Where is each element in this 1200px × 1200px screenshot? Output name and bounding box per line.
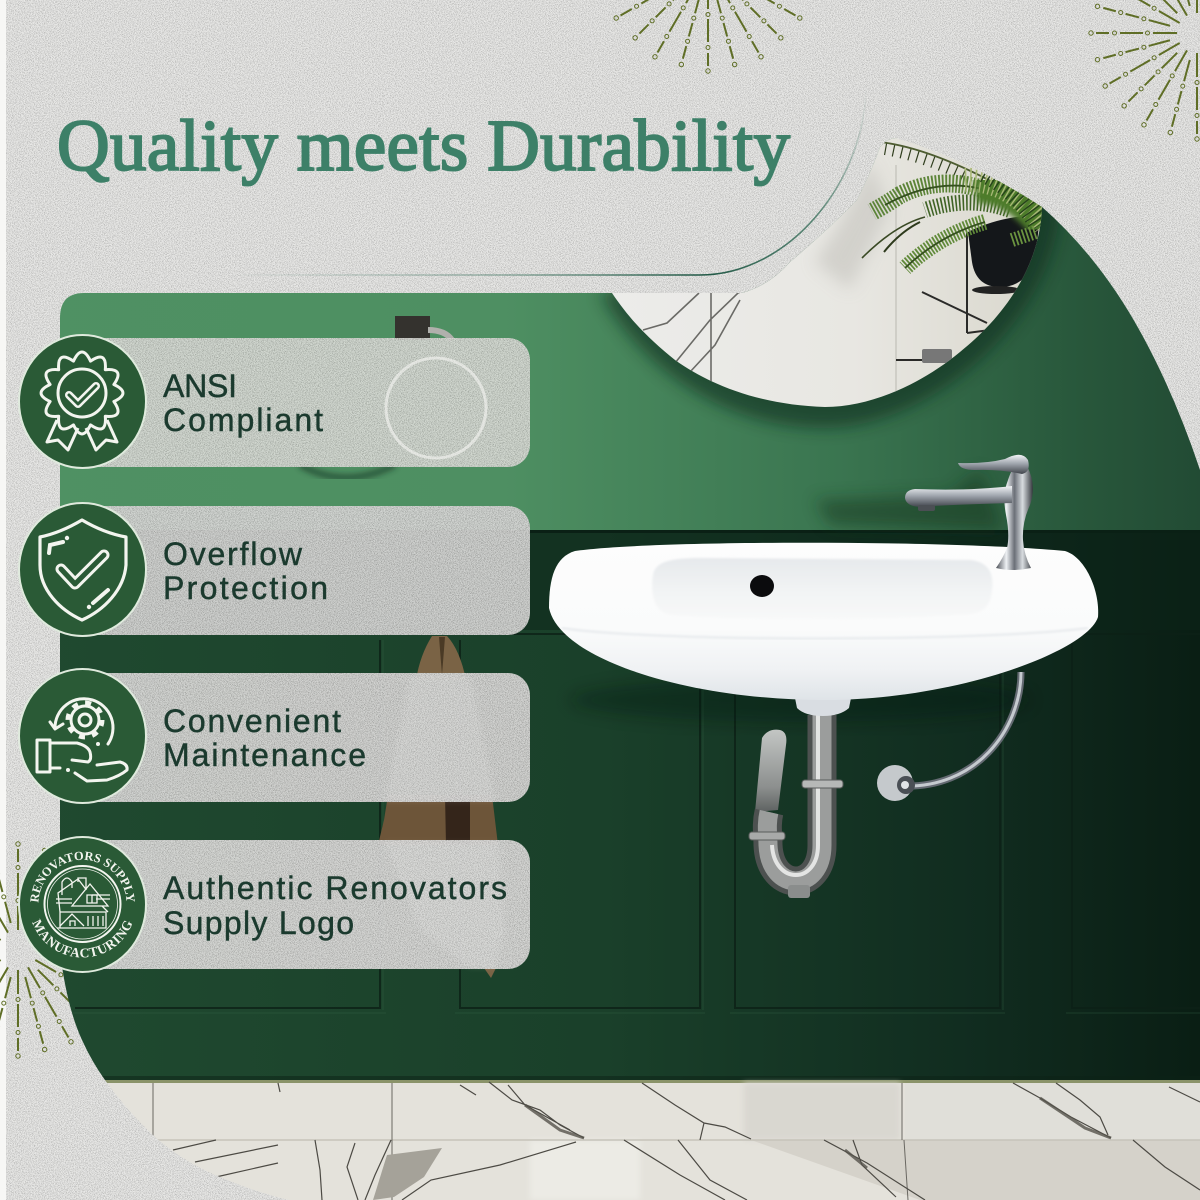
sunburst: top right bbox=[1089, 0, 1200, 141]
faucet bbox=[905, 455, 1033, 570]
title panel arc line bbox=[230, 85, 866, 275]
panel: feature rows bbox=[60, 338, 530, 969]
round mirror with reflection bbox=[612, 138, 1042, 407]
row background: ANSI bbox=[60, 338, 530, 467]
label: Authentic Renovators Supply Logo: Supply Logo bbox=[163, 905, 354, 941]
sink assembly bbox=[549, 455, 1098, 898]
row background: Overflow bbox=[60, 506, 530, 635]
faucet shadow on wall bbox=[815, 470, 1000, 530]
p-trap bbox=[749, 715, 843, 898]
label: Convenient Maintenance: Convenient bbox=[163, 703, 341, 739]
green upper wall bbox=[0, 130, 1200, 532]
hanging towel bbox=[378, 636, 498, 978]
house illustration bbox=[56, 878, 110, 928]
marble vein reflection bbox=[642, 293, 741, 382]
mirror shadow on wall bbox=[597, 207, 1064, 436]
label: Authentic Renovators Supply Logo bbox=[163, 870, 507, 941]
plant pot bbox=[968, 215, 1040, 287]
label: ANSI Compliant bbox=[163, 368, 323, 438]
label: ANSI Compliant: ANSI bbox=[163, 368, 237, 404]
bowl recess bbox=[652, 558, 992, 620]
sunburst: top centre bbox=[600, 0, 816, 73]
ring seen through frosted glass bbox=[386, 358, 486, 458]
sink shadow bbox=[570, 678, 1030, 722]
icon: Renovators Supply logo: RENOVATORS SUPPLY bbox=[30, 852, 135, 903]
overflow hole bbox=[750, 575, 774, 597]
supply hose bbox=[877, 672, 1021, 801]
label: Convenient Maintenance bbox=[163, 703, 366, 773]
palm fronds bbox=[862, 142, 1048, 268]
icon: shield check bbox=[19, 503, 146, 636]
towel ghost through frosted glass bbox=[385, 675, 505, 968]
label: Overflow Protection: Overflow bbox=[163, 536, 303, 572]
title: Quality meets Durability bbox=[57, 105, 790, 186]
icon: hand with gear bbox=[19, 669, 146, 803]
label: ANSI Compliant: Compliant bbox=[163, 402, 323, 438]
front rim highlight bbox=[562, 628, 1088, 638]
icon: Renovators Supply logo: MANUFACTURING bbox=[32, 918, 132, 958]
label: Overflow Protection bbox=[163, 536, 328, 606]
row background: Maintenance bbox=[60, 673, 530, 802]
dark lower wall with moulding bbox=[0, 530, 1200, 1082]
ceramic basin bbox=[549, 543, 1098, 700]
label: Overflow Protection: Protection bbox=[163, 570, 328, 606]
marble floor bbox=[0, 1080, 1200, 1200]
sunburst: bottom left bbox=[0, 842, 126, 1058]
towel ring behind panel bbox=[300, 316, 452, 478]
door frame and rails bbox=[896, 233, 990, 360]
row background: Logo bbox=[60, 840, 530, 969]
label: Authentic Renovators Supply Logo: Authentic Renovators bbox=[163, 870, 507, 906]
icon: award rosette bbox=[19, 335, 146, 468]
drain collar bbox=[795, 698, 851, 716]
label: Convenient Maintenance: Maintenance bbox=[163, 737, 366, 773]
wall reflection of trap bbox=[755, 730, 786, 812]
icon: Renovators Supply logo bbox=[18, 836, 147, 973]
soft shadow on wall bbox=[816, 170, 890, 287]
